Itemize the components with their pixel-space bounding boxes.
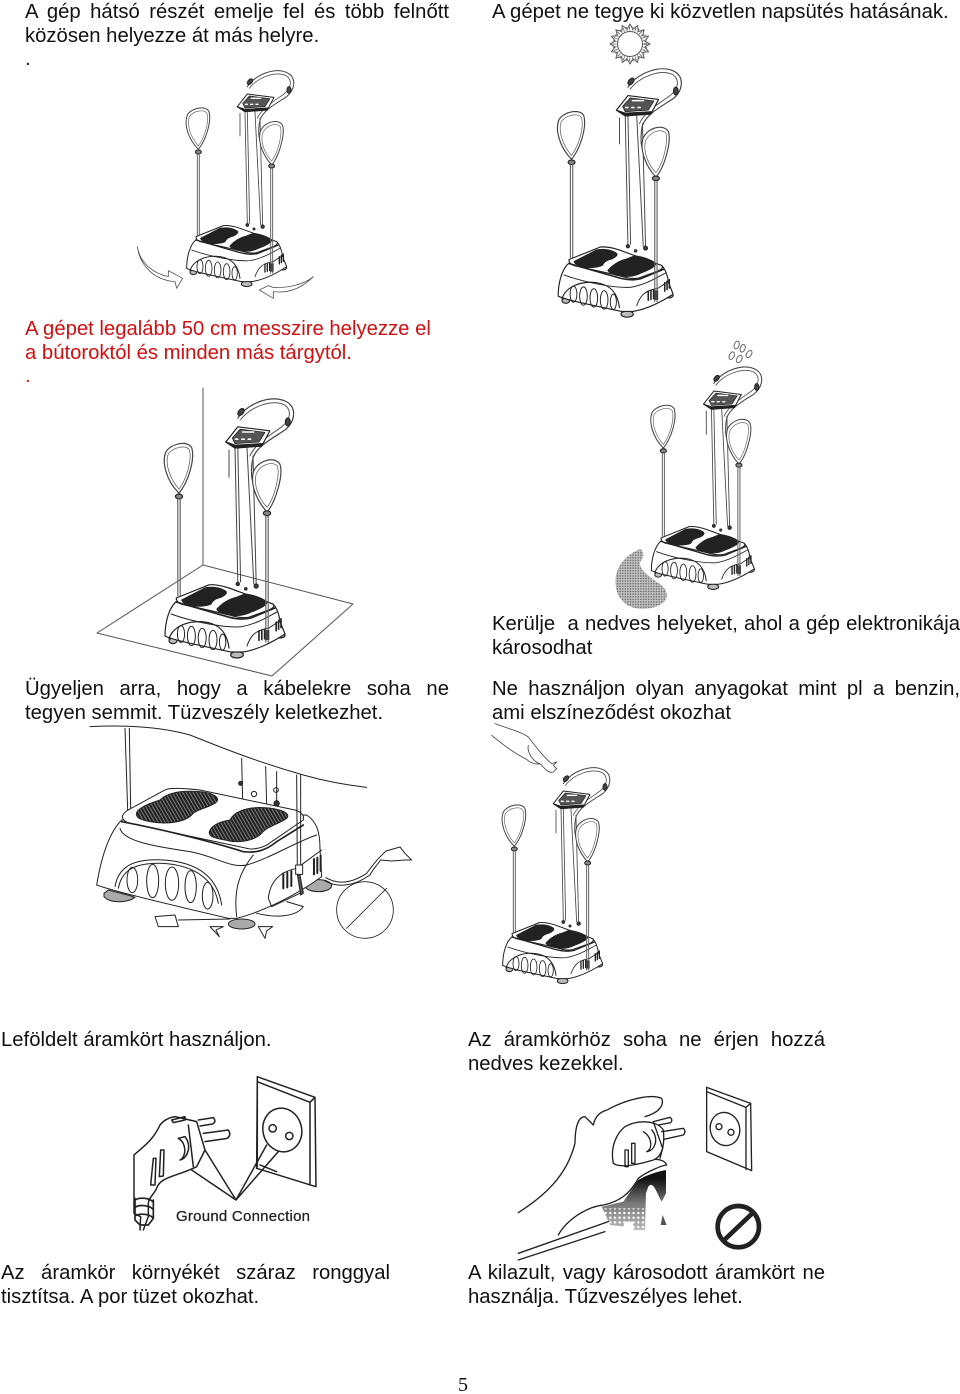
water puddle [615, 549, 667, 609]
text: grounded outlet: Leföldelt áramkört használjon. [1, 1029, 272, 1051]
power cord and plug [323, 847, 412, 885]
label: Ground Connection: Ground Connection [176, 1208, 310, 1225]
text: cable warning: Ügyeljen arra, hogy a kábelekre soha ne [25, 678, 449, 700]
text: damaged outlet [468, 1262, 825, 1308]
text: avoid moisture: károsodhat [492, 636, 592, 658]
machine with turning arrows [137, 71, 313, 298]
text: cleaning outlet: Az áramkör környékét száraz ronggyal [1, 1262, 390, 1284]
text: wet hands warning: Az áramkörhöz soha ne érjen hozzá [468, 1029, 825, 1051]
room corner floor [97, 388, 353, 676]
text: cleaning outlet [1, 1262, 390, 1308]
grounded plug and socket [134, 1077, 316, 1230]
text: avoid sunlight: A gépet ne tegye ki közvetlen napsütés hatásának. [492, 1, 949, 23]
unplugged plug [155, 902, 303, 927]
machine near moisture [651, 367, 762, 589]
machine in room corner [164, 399, 294, 658]
text: cable warning [25, 678, 449, 724]
red text: keep distance [25, 318, 431, 387]
text: damaged outlet: használja. Tűzveszélyes lehet. [468, 1286, 743, 1308]
red text: keep distance: . [25, 365, 31, 387]
prohibition circle [337, 882, 393, 938]
text: avoid moisture: Kerülje a nedves helyeket, ahol a gép elektronikája [492, 613, 960, 635]
warning arrows [210, 927, 273, 938]
arrow: left turn [137, 247, 183, 288]
machine with liquid warning [502, 768, 610, 984]
text: chemicals warning: Ne használjon olyan anyagokat mint pl a benzin, [492, 678, 960, 700]
text: moving the machine [25, 1, 449, 70]
text: damaged outlet: A kilazult, vagy károsodott áramkört ne [468, 1262, 825, 1284]
text: moving the machine: A gép hátsó részét emelje fel és több felnőtt [25, 1, 449, 23]
close-up base with power cord [90, 726, 412, 938]
icon: prohibition sign [718, 1206, 759, 1247]
text: cleaning outlet: tisztítsa. A por tüzet okozhat. [1, 1286, 259, 1308]
icon: water drops [728, 340, 753, 364]
wet hand touching plug [518, 1087, 759, 1260]
icon: sun [610, 24, 650, 64]
arrow: right turn [259, 277, 313, 298]
machine in sunlight [558, 69, 681, 317]
text: avoid moisture [492, 613, 960, 658]
text: chemicals warning: ami elszíneződést okozhat [492, 702, 731, 724]
red text: keep distance: a bútoroktól és minden más tárgytól. [25, 342, 352, 364]
text: wet hands warning: nedves kezekkel. [468, 1052, 624, 1074]
text: wet hands warning [468, 1029, 826, 1074]
text: moving the machine: . [25, 48, 31, 70]
hand pouring liquid [492, 724, 557, 772]
red text: keep distance: A gépet legalább 50 cm messzire helyezze el [25, 318, 431, 340]
text: cable warning: tegyen semmit. Tüzveszély keletkezhet. [25, 702, 383, 724]
text: moving the machine: közösen helyezze át más helyre. [25, 24, 319, 46]
text: chemicals warning [492, 678, 960, 724]
